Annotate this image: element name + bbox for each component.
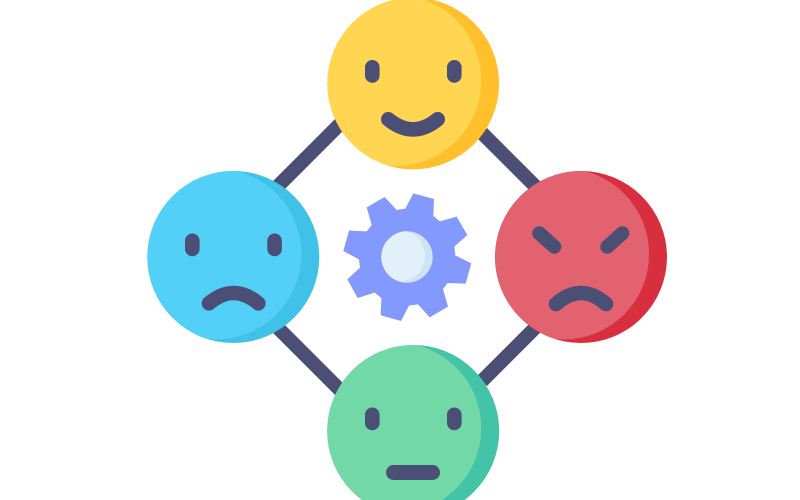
eyes bbox=[185, 234, 282, 256]
frown bbox=[209, 293, 258, 303]
angry eyes bbox=[539, 233, 622, 247]
eyes bbox=[365, 408, 462, 430]
flat mouth bbox=[386, 465, 440, 480]
connector lines bbox=[270, 119, 556, 395]
face: sad blue bbox=[130, 168, 319, 343]
icon: gear bbox=[343, 193, 471, 321]
smile bbox=[388, 119, 438, 129]
diagram: four emotion faces around a gear bbox=[147, 0, 667, 500]
face: angry red bbox=[495, 171, 667, 343]
face: happy yellow bbox=[310, 0, 499, 169]
face: neutral green bbox=[327, 345, 500, 500]
frown bbox=[556, 293, 606, 304]
eyes bbox=[365, 60, 462, 83]
